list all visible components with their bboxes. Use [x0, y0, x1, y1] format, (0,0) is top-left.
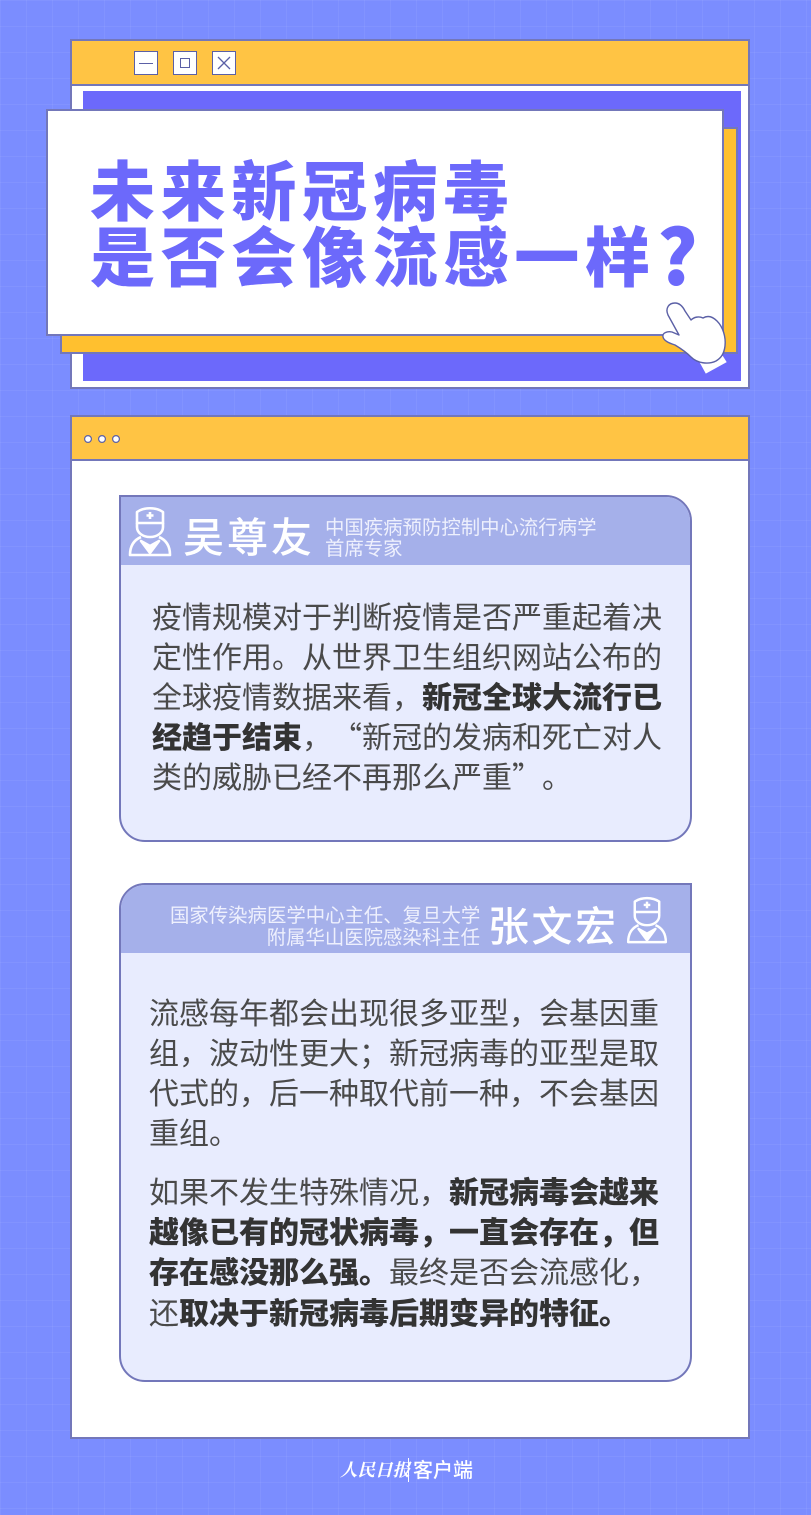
expert 2 header band [121, 885, 690, 953]
expert 2 title: 附属华山医院感染科主任 [267, 920, 480, 950]
close button [212, 51, 236, 75]
expert 2 title [170, 899, 480, 950]
expert 1 text: 类的威胁已经不再那么严重”。 [152, 753, 572, 797]
expert 2 text: 重组。 [149, 1109, 239, 1153]
window dots [84, 435, 120, 443]
title window bar [70, 39, 750, 86]
title question mark: ? [657, 197, 698, 307]
expert 2 text: 代式的，后一种取代前一种，不会基因 [149, 1069, 659, 1113]
purple backing panel [83, 91, 741, 381]
expert 2 text: 存在感没那么强。最终是否会流感化， [149, 1248, 659, 1292]
expert 1 header band [121, 497, 690, 565]
minimize button [134, 51, 158, 75]
footer logo: 客户端 [413, 1454, 473, 1483]
footer logo [340, 1454, 473, 1483]
expert 1 title: 中国疾病预防控制中心流行病学 [325, 511, 596, 540]
expert 2 text: 如果不发生特殊情况，新冠病毒会越来 [149, 1168, 659, 1212]
expert 2 text: 流感每年都会出现很多亚型，会基因重 [149, 989, 659, 1033]
expert 1 title [325, 511, 596, 561]
expert 2 text: 还取决于新冠病毒后期变异的特征。 [149, 1289, 629, 1333]
expert 1 text: 疫情规模对于判断疫情是否严重起着决 [152, 593, 662, 637]
expert 1 text: 定性作用。从世界卫生组织网站公布的 [152, 633, 662, 677]
title line 1: 未来新冠病毒 [90, 140, 514, 234]
title panel [46, 109, 724, 336]
expert 1 name: 吴尊友 [183, 504, 315, 564]
content window [70, 415, 750, 1439]
expert 1 title: 首席专家 [325, 532, 403, 561]
panel: expert 2 [119, 883, 692, 1382]
content window bar [70, 415, 750, 461]
title window [70, 39, 750, 389]
expert 1 text: 经趋于结束，“新冠的发病和死亡对人 [152, 713, 662, 757]
expert 2 text: 越像已有的冠状病毒，一直会存在，但 [149, 1208, 659, 1252]
panel: expert 1 [119, 495, 692, 842]
yellow backing panel [60, 127, 738, 354]
expert 2 text [149, 989, 659, 1333]
icon: doctor 1 [128, 507, 172, 556]
icon: pointing hand [662, 302, 727, 374]
expert 2 text: 组，波动性更大；新冠病毒的亚型是取 [149, 1029, 659, 1073]
expert 1 text: 全球疫情数据来看，新冠全球大流行已 [152, 673, 662, 717]
expert 2 name: 张文宏 [488, 893, 618, 953]
title line 2: 是否会像流感一样 [90, 206, 656, 300]
expert 2 title: 国家传染病医学中心主任、复旦大学 [170, 899, 480, 928]
expert 1 text [152, 593, 662, 797]
maximize button [173, 51, 197, 75]
footer logo: 人民日报 [340, 1457, 410, 1482]
icon: doctor 2 [627, 896, 667, 944]
